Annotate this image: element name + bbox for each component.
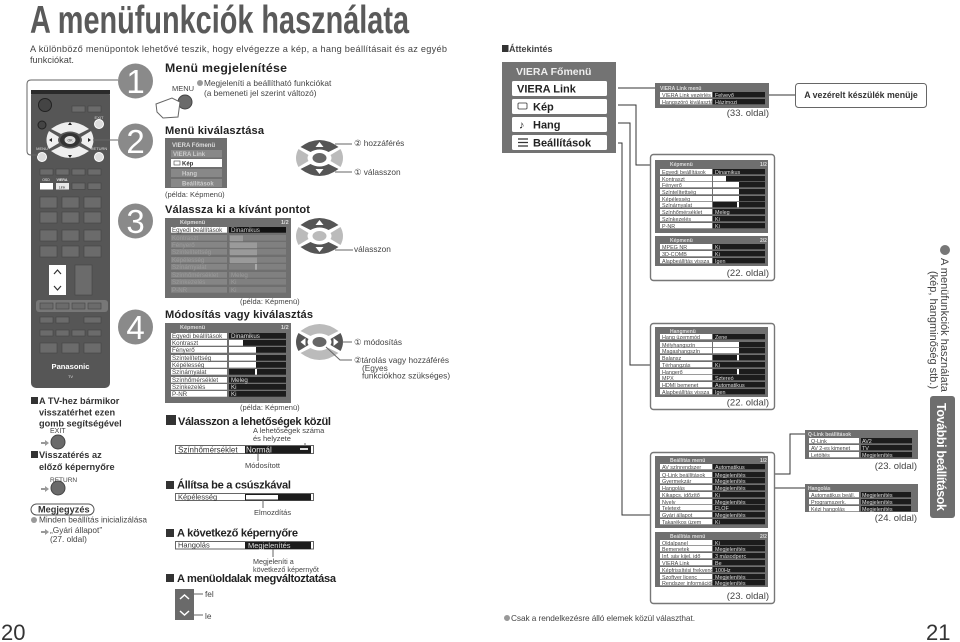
panel: settings menu overview: Szoftver licenc bbox=[662, 575, 697, 581]
remote control: OK bbox=[67, 138, 73, 142]
panel: picture menu overview: Alapbeállítás vissza bbox=[662, 259, 709, 265]
heading: select menu: Menü kiválasztása bbox=[165, 125, 265, 137]
picture menu dimmed: Fényerő bbox=[172, 242, 195, 249]
panel: picture menu overview: (22. oldal) bbox=[727, 268, 769, 279]
panel: Q-Link settings: Megjelenítés bbox=[862, 453, 893, 459]
intro text bbox=[30, 44, 447, 65]
heading: show menu: Menü megjelenítése bbox=[165, 61, 287, 75]
side tab: further settings: További beállítások bbox=[934, 403, 948, 511]
picture menu active: Ki bbox=[231, 384, 237, 391]
page up/down button bbox=[175, 589, 214, 621]
panel: picture menu overview: Meleg bbox=[715, 210, 730, 216]
panel: settings menu overview: Automatikus bbox=[715, 465, 745, 471]
picture menu active: Meleg bbox=[231, 377, 248, 384]
main menu example: Kép bbox=[182, 162, 194, 168]
picture menu active: 1/2 bbox=[281, 325, 289, 331]
panel: sound menu overview: (22. oldal) bbox=[727, 398, 769, 408]
next screen example: következő képernyőt bbox=[253, 565, 319, 574]
panel: VIERA Link menu: Hangszóró kiválasztása bbox=[662, 100, 719, 106]
callouts: step 4: ②tárolás vagy hozzáférés bbox=[354, 355, 449, 365]
picture menu dimmed: Ki bbox=[231, 279, 237, 286]
picture menu dimmed: Egyedi beállítások bbox=[172, 227, 223, 234]
main menu example bbox=[165, 138, 227, 188]
panel: picture menu overview: Képmenü bbox=[670, 238, 693, 244]
panel: picture menu overview: Képélesség bbox=[662, 197, 690, 203]
panel: settings menu overview: 1/2 bbox=[760, 458, 767, 464]
picture menu dimmed: Színkezelés bbox=[172, 279, 205, 286]
picture menu dimmed: Meleg bbox=[231, 272, 248, 279]
intro text: funkciókat. bbox=[30, 55, 74, 65]
panel: Q-Link settings: Letöltés bbox=[811, 453, 830, 459]
picture menu active: Kontraszt bbox=[172, 340, 198, 347]
overview main menu: VIERA Főmenü bbox=[516, 66, 591, 78]
picture menu dimmed: Képélesség bbox=[172, 257, 205, 264]
remote control: EXIT bbox=[95, 115, 104, 120]
note: return to TV: gomb segítségével bbox=[39, 418, 122, 428]
panel: sound menu overview: Igen bbox=[715, 390, 726, 396]
step number 4: 4 bbox=[126, 309, 145, 346]
main menu example: Hang bbox=[182, 172, 197, 178]
panel: settings menu overview: Megjelenítés bbox=[715, 486, 746, 492]
callouts: step 2: ② hozzáférés bbox=[354, 138, 404, 148]
connector lines from overview menu bbox=[618, 88, 805, 515]
footnote: Csak a rendelkezésre álló elemek közül választhat. bbox=[511, 613, 695, 623]
panel: picture menu overview: 2/2 bbox=[760, 238, 767, 244]
panel: picture menu overview: 1/2 bbox=[760, 162, 767, 168]
panel: sound menu overview: Hang üzemmód bbox=[662, 335, 700, 341]
icon: hand pressing MENU bbox=[156, 84, 194, 118]
picture menu dimmed: Ki bbox=[231, 287, 237, 294]
panel: settings menu overview: Beállítás menü bbox=[670, 458, 705, 464]
panel: settings menu overview: 100Hz bbox=[715, 568, 731, 574]
side tab: further settings bbox=[930, 396, 955, 518]
panel: settings menu overview: Megjelenítés bbox=[715, 479, 746, 485]
panel: settings menu overview: Megjelenítés bbox=[715, 581, 746, 587]
slider example: Elmozdítás bbox=[254, 508, 291, 517]
heading: slider: Állítsa be a csúszkával bbox=[177, 478, 291, 492]
note: previous screen: Visszatérés az bbox=[39, 450, 102, 460]
panel: sound menu overview: Zene bbox=[715, 335, 727, 341]
picture menu active: Színkezelés bbox=[172, 384, 205, 391]
note: return to TV: A TV-hez bármikor bbox=[39, 396, 120, 406]
remote control: RETURN bbox=[91, 146, 107, 151]
picture menu dimmed: Dinamikus bbox=[231, 227, 260, 234]
panel: sound menu overview: Balansz bbox=[662, 356, 681, 362]
panel: picture menu overview: Kontraszt bbox=[662, 177, 685, 183]
panel: sound menu overview: Automatikus bbox=[715, 383, 745, 389]
panel: settings menu overview: Megjelenítés bbox=[715, 500, 746, 506]
option example: és helyzete bbox=[253, 434, 291, 443]
d-pad: step 2 bbox=[296, 140, 343, 176]
callout: step 3: válasszon bbox=[354, 244, 391, 254]
panel: settings menu overview: Megjelenítés bbox=[715, 473, 746, 479]
panel: picture menu overview: Fényerő bbox=[662, 183, 682, 189]
panel: settings menu overview: Hangolás bbox=[662, 486, 685, 492]
panel: picture menu overview: Színhőmérséklet bbox=[662, 210, 703, 216]
picture menu active: Képélesség bbox=[172, 362, 205, 369]
panel: settings menu overview: Q-Link beállítások bbox=[662, 473, 705, 479]
panel: sound menu overview: Ki bbox=[715, 363, 720, 369]
panel: picture menu overview: Ki bbox=[715, 217, 720, 223]
heading: modify or select: Módosítás vagy kiválasztás bbox=[165, 309, 313, 321]
next screen example: Megjelenítés bbox=[248, 541, 291, 550]
panel: VIERA Link menu bbox=[655, 83, 769, 119]
panel: tuning settings: Megjelenítés bbox=[862, 493, 893, 499]
note: previous screen: előző képernyőre bbox=[39, 462, 115, 472]
remote control: OSD bbox=[42, 178, 50, 182]
step number 2: 2 bbox=[126, 123, 145, 160]
main menu example: VIERA Link bbox=[173, 152, 206, 158]
panel: Q-Link settings: TV bbox=[862, 446, 869, 452]
note: reset: Minden beállítás inicializálása bbox=[39, 514, 147, 524]
panel: picture menu overview: Ki bbox=[715, 245, 720, 251]
picture menu active: Színtelítettség bbox=[172, 355, 212, 362]
panel: settings menu overview: Képfrissítési frekvencia bbox=[662, 568, 717, 574]
panel: settings menu overview: Kikapcs. időzítő bbox=[662, 493, 700, 499]
page up/down button: le bbox=[205, 611, 212, 621]
picture menu dimmed: Színtelítettség bbox=[172, 249, 212, 256]
panel: settings menu overview: Megjelenítés bbox=[715, 547, 746, 553]
panel: controlled device menu bbox=[796, 84, 926, 108]
remote control: VIERA bbox=[57, 178, 68, 182]
panel: tuning settings: Hangolás bbox=[808, 486, 831, 492]
panel: Q-Link settings: Q-Link beállítások bbox=[808, 432, 851, 438]
slider example bbox=[176, 492, 314, 517]
remote control: MENU bbox=[36, 146, 48, 151]
panel: Q-Link settings: AV2 bbox=[862, 439, 872, 445]
picture menu dimmed: Kontraszt bbox=[172, 235, 198, 242]
icon: hand pressing MENU: MENU bbox=[172, 84, 194, 93]
picture menu active: Ki bbox=[231, 391, 237, 398]
heading: change pages: A menüoldalak megváltoztatása bbox=[177, 573, 337, 585]
panel: settings menu overview: Gyári állapot bbox=[662, 513, 693, 519]
slider example: Képélesség bbox=[178, 492, 217, 502]
panel: picture menu overview: Színtelítettség bbox=[662, 190, 696, 196]
panel: sound menu overview: Sztereó bbox=[715, 376, 734, 382]
option example: Módosított bbox=[245, 461, 281, 470]
panel: tuning settings: Megjelenítés bbox=[862, 507, 893, 513]
panel: picture menu overview: Dinamikus bbox=[715, 170, 740, 176]
panel: settings menu overview: Ki bbox=[715, 541, 720, 547]
overview main menu: ♪ bbox=[519, 120, 524, 132]
panel: VIERA Link menu: VIERA Link vezérlés bbox=[662, 93, 711, 99]
overview main menu: VIERA Link bbox=[517, 84, 577, 96]
side label: current section: A menüfunkciók használata bbox=[938, 258, 950, 393]
next screen example: Megjeleníti a bbox=[253, 557, 294, 566]
picture menu active: Fényerő bbox=[172, 347, 195, 354]
step number 4 bbox=[118, 309, 153, 346]
panel: settings menu overview: 2/2 bbox=[760, 534, 767, 540]
panel: picture menu overview: Képmenü bbox=[670, 162, 693, 168]
side label: current section: (kép, hangminőség stb.) bbox=[927, 271, 939, 389]
intro text: A különböző menüpontok lehetővé teszik, hogy elvégezze a kép, a hang beállításait és az egyéb bbox=[30, 44, 447, 54]
panel: picture menu overview: Egyedi beállítások bbox=[662, 170, 706, 176]
option example bbox=[176, 426, 325, 470]
panel: picture menu overview: 3D-COMB bbox=[662, 252, 687, 258]
step number 1: 1 bbox=[126, 63, 145, 100]
panel: settings menu overview: Nyelv bbox=[662, 500, 676, 506]
panel: sound menu overview: Térhangzás bbox=[662, 363, 691, 369]
note: reset: „Gyári állapot” bbox=[50, 525, 102, 535]
picture menu dimmed: 1/2 bbox=[281, 220, 289, 226]
panel: settings menu overview: (23. oldal) bbox=[727, 591, 769, 602]
picture menu active: Egyedi beállítások bbox=[172, 333, 223, 340]
note: reset: (27. oldal) bbox=[50, 534, 87, 544]
panel: Q-Link settings bbox=[805, 430, 918, 472]
heading: select item: Válassza ki a kívánt pontot bbox=[165, 204, 310, 216]
panel: settings menu overview: Megjelenítés bbox=[715, 575, 746, 581]
text: show menu description: (a bemeneti jel szerint változó) bbox=[204, 88, 317, 98]
panel: settings menu overview: Oldalpanel bbox=[662, 541, 688, 547]
caption: (példa: Képmenü) bbox=[240, 403, 300, 412]
callouts: step 2: ① válasszon bbox=[354, 167, 401, 177]
panel: picture menu overview: Igen bbox=[715, 259, 726, 265]
panel: VIERA Link menu: Felvevő bbox=[715, 93, 734, 99]
panel: sound menu overview: Hangerő bbox=[662, 370, 683, 376]
page up/down button: fel bbox=[205, 589, 214, 599]
picture menu active bbox=[165, 323, 291, 403]
panel: settings menu overview: FLOF bbox=[715, 506, 729, 512]
panel: VIERA Link menu: VIERA Link menü bbox=[660, 86, 702, 92]
panel: tuning settings: Kézi hangolás bbox=[811, 507, 845, 513]
caption: (példa: Képmenü) bbox=[165, 190, 225, 199]
picture menu dimmed: Színhőmérséklet bbox=[172, 272, 218, 279]
overview main menu bbox=[502, 62, 616, 153]
panel: settings menu overview: Be bbox=[715, 561, 722, 567]
next screen example: Hangolás bbox=[178, 540, 210, 550]
d-pad: step 4 bbox=[296, 324, 343, 360]
panel: picture menu overview: Ki bbox=[715, 252, 720, 258]
picture menu active: Dinamikus bbox=[231, 333, 260, 340]
callouts: step 4: (Egyes bbox=[362, 363, 388, 373]
panel: settings menu overview: Ki bbox=[715, 493, 720, 499]
picture menu active: Színárnyalat bbox=[172, 369, 207, 376]
panel: picture menu overview: P-NR bbox=[662, 224, 675, 230]
remote control: Panasonic bbox=[52, 362, 89, 371]
overview main menu: Kép bbox=[533, 102, 554, 114]
side label: current section bbox=[927, 245, 950, 393]
heading: choose option: Válasszon a lehetőségek közül bbox=[178, 416, 331, 428]
panel: controlled device menu: A vezérelt készülék menüje bbox=[804, 90, 918, 100]
note: reset bbox=[31, 504, 147, 544]
panel: tuning settings: Megjelenítés bbox=[862, 500, 893, 506]
panel: sound menu overview bbox=[650, 324, 774, 410]
option example: Színhőmérséklet bbox=[178, 446, 238, 454]
step number 3 bbox=[118, 203, 153, 240]
panel: tuning settings: Programszerk. bbox=[811, 500, 846, 506]
panel: settings menu overview: Bemenetek bbox=[662, 547, 690, 553]
panel: tuning settings: (24. oldal) bbox=[875, 513, 917, 524]
picture menu active: Képmenü bbox=[180, 325, 205, 331]
note: reset: Megjegyzés bbox=[38, 504, 90, 514]
panel: settings menu overview: VIERA Link bbox=[662, 561, 690, 567]
panel: settings menu overview: Beállítás menü bbox=[670, 534, 705, 540]
callouts: step 4 bbox=[326, 337, 450, 380]
callouts: step 4: ① módosítás bbox=[354, 337, 402, 347]
step number 2 bbox=[118, 123, 153, 160]
panel: sound menu overview: Hangmenü bbox=[670, 329, 696, 335]
callout: step 3 bbox=[335, 244, 391, 254]
note: return to TV: EXIT bbox=[50, 428, 66, 435]
panel: picture menu overview bbox=[650, 154, 774, 280]
panel: Q-Link settings: (23. oldal) bbox=[875, 461, 917, 472]
panel: Q-Link settings: AV 2-es kimenet bbox=[811, 446, 851, 452]
remote control bbox=[31, 90, 110, 388]
picture menu dimmed: P-NR bbox=[172, 287, 188, 294]
picture menu dimmed bbox=[165, 218, 291, 298]
panel: settings menu overview: Inf. sáv kijel. idő bbox=[662, 554, 700, 560]
panel: settings menu overview: Gyermekzár bbox=[662, 479, 692, 485]
option example: Normál bbox=[246, 446, 272, 454]
panel: tuning settings: Automatikus beáll. bbox=[811, 493, 855, 499]
panel: settings menu overview: 3 másodperc bbox=[715, 554, 746, 560]
main menu example: Beállítások bbox=[182, 182, 214, 188]
option example: A lehetőségek száma bbox=[253, 426, 325, 435]
text: show menu description: Megjeleníti a beállítható funkciókat bbox=[204, 78, 332, 88]
panel: settings menu overview: Ki bbox=[715, 520, 720, 526]
panel: sound menu overview: Alapbeállítás vissza bbox=[662, 390, 709, 396]
remote control: Link bbox=[59, 186, 65, 190]
panel: picture menu overview: Ki bbox=[715, 224, 720, 230]
panel: Q-Link settings: Q-Link bbox=[811, 439, 827, 445]
panel: sound menu overview: Magashangszín bbox=[662, 349, 700, 355]
panel: VIERA Link menu: (33. oldal) bbox=[727, 108, 769, 119]
callouts: step 4: funkciókhoz szükséges) bbox=[362, 370, 450, 380]
panel: settings menu overview bbox=[650, 452, 774, 604]
picture menu dimmed: Képmenü bbox=[180, 220, 205, 226]
panel: settings menu overview: Megjelenítés bbox=[715, 513, 746, 519]
panel: sound menu overview: Mélyhangszín bbox=[662, 343, 695, 349]
overview main menu: Beállítások bbox=[533, 138, 592, 150]
note: previous screen bbox=[31, 450, 115, 495]
panel: sound menu overview: HDMI bemenet bbox=[662, 383, 699, 389]
panel: picture menu overview: Színárnyalat bbox=[662, 203, 692, 209]
heading: overview: Áttekintés bbox=[509, 44, 553, 54]
title: A menüfunkciók használata bbox=[30, 0, 409, 42]
panel: settings menu overview: AV színrendszer bbox=[662, 465, 701, 471]
panel: settings menu overview: Rendszer információk bbox=[662, 581, 714, 587]
step number 1 bbox=[118, 63, 153, 100]
next screen example bbox=[176, 540, 319, 574]
note: return to TV bbox=[31, 396, 122, 449]
panel: sound menu overview: MPX bbox=[662, 376, 674, 382]
step number 3: 3 bbox=[126, 203, 145, 240]
connector lines from remote to steps bbox=[27, 80, 118, 155]
panel: settings menu overview: Takarékos üzem bbox=[662, 520, 702, 526]
text: show menu description bbox=[197, 78, 332, 98]
main menu example: VIERA Főmenü bbox=[172, 143, 215, 149]
overview main menu: Hang bbox=[533, 120, 560, 132]
note: previous screen: RETURN bbox=[50, 477, 77, 484]
picture menu active: P-NR bbox=[172, 391, 188, 398]
d-pad: step 3 bbox=[296, 218, 343, 254]
panel: picture menu overview: Színkezelés bbox=[662, 217, 691, 223]
callouts: step 2 bbox=[335, 138, 404, 177]
panel: picture menu overview: MPEG NR bbox=[662, 245, 687, 251]
picture menu active: Színhőmérséklet bbox=[172, 377, 218, 384]
remote control: TV bbox=[68, 374, 73, 379]
panel: tuning settings bbox=[805, 484, 918, 524]
caption: (példa: Képmenü) bbox=[240, 297, 300, 306]
note: return to TV: visszatérhet ezen bbox=[39, 408, 115, 418]
picture menu dimmed: Színárnyalat bbox=[172, 264, 207, 271]
panel: settings menu overview: Teletext bbox=[662, 506, 681, 512]
panel: VIERA Link menu: Házimozi bbox=[715, 100, 737, 106]
heading: next screen: A következő képernyőre bbox=[177, 528, 298, 540]
